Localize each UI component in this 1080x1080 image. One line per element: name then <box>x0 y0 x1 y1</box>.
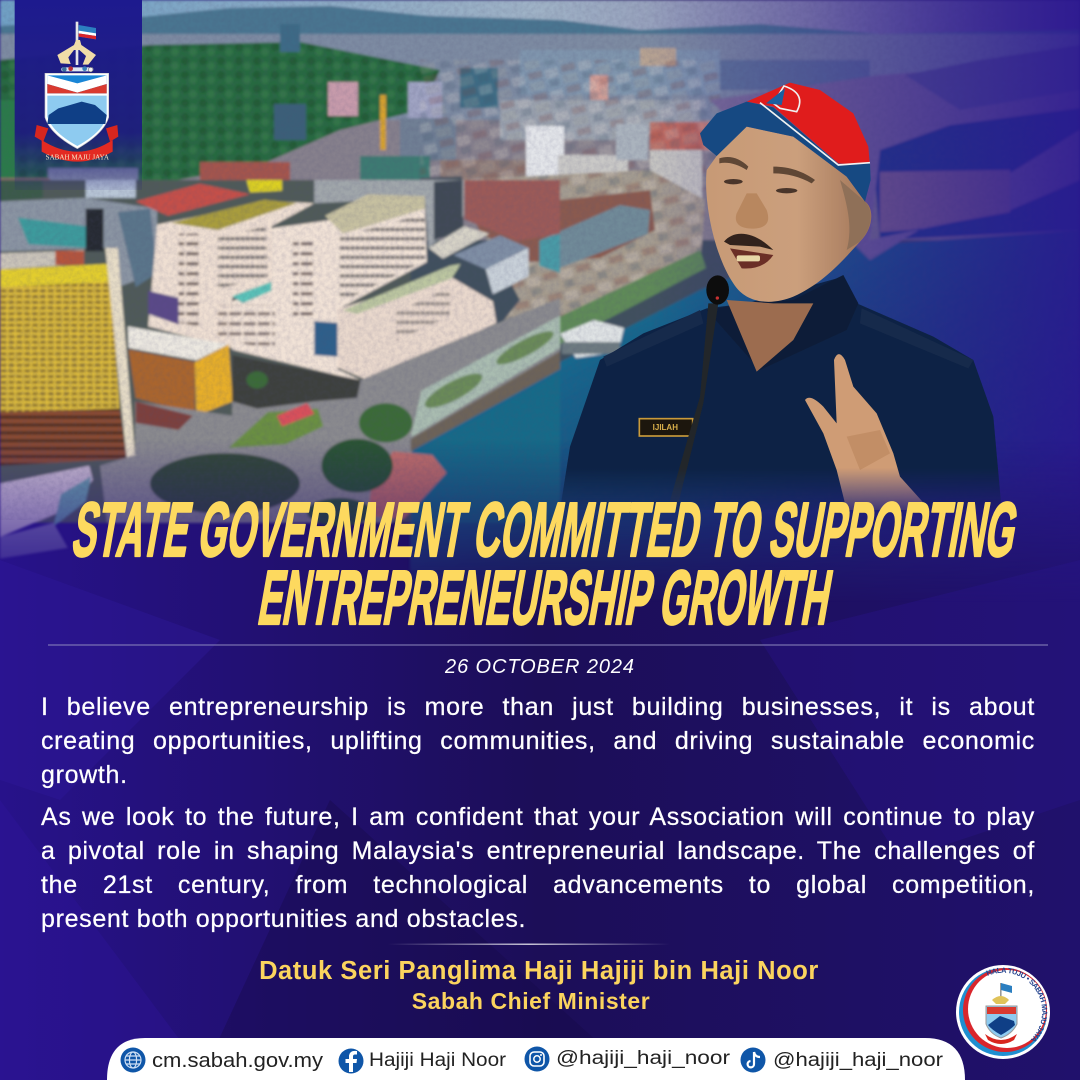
paragraph 1: growth. <box>41 761 128 789</box>
cap <box>700 83 871 202</box>
paragraph 1: creating opportunities, uplifting communities, and driving sustainable economic <box>41 727 1035 755</box>
portrait of the chief minister <box>560 83 1002 510</box>
paragraph 2: As we look to the future, I am confident that your Association will continue to play <box>41 803 1035 831</box>
paragraph 2: the 21st century, from technological advancements to global competition, <box>41 871 1035 899</box>
icon: instagram <box>524 1046 550 1072</box>
motto ribbon: SABAH MAJU JAYA <box>46 153 109 161</box>
social media bar: @hajiji_haji_noor <box>556 1048 731 1069</box>
paragraph 1: I believe entrepreneurship is more than just building businesses, it is about <box>41 693 1035 721</box>
right docks <box>710 60 1080 260</box>
social media bar <box>107 1038 965 1080</box>
social media bar: Hajiji Haji Noor <box>369 1050 507 1071</box>
face <box>706 127 871 302</box>
trees <box>359 403 412 442</box>
crest arms <box>57 40 96 65</box>
sea corner <box>413 402 560 523</box>
right far blocks <box>314 180 464 248</box>
date: 26 OCTOBER 2024 <box>445 656 635 678</box>
social media bar: cm.sabah.gov.my <box>152 1050 323 1072</box>
gold tower <box>0 280 120 412</box>
ferry terminal <box>560 320 624 358</box>
signatory title: Sabah Chief Minister <box>412 988 650 1014</box>
paragraph 2: present both opportunities and obstacles. <box>41 905 526 933</box>
shirt <box>560 277 1002 510</box>
distant blocks <box>280 24 300 52</box>
icon: facebook <box>338 1048 364 1074</box>
far left blocks <box>0 198 157 287</box>
ground <box>100 298 560 523</box>
lower left buildings detail <box>0 180 560 559</box>
circular badge: Hala Tuju Sabah Maju Jaya: HALA TUJU • SABAH MAJU JAYA <box>986 968 1048 1042</box>
circular badge: Hala Tuju Sabah Maju Jaya <box>956 965 1050 1059</box>
waterfront town <box>480 170 706 321</box>
white corner building <box>0 466 93 537</box>
wreath <box>61 66 93 72</box>
hand <box>805 354 930 510</box>
flag and pole <box>76 22 96 65</box>
orange building <box>128 326 229 360</box>
social media bar: @hajiji_haji_noor <box>773 1050 944 1071</box>
paragraph 2: a pivotal role in shaping Malaysia's entrepreneurial landscape. The challenges of <box>41 837 1035 865</box>
icon: website <box>120 1048 146 1072</box>
sea <box>410 230 1080 600</box>
paragraph 1 <box>41 693 1035 789</box>
shield <box>45 73 109 149</box>
name tag: IJILAH <box>653 423 678 432</box>
logo panel with state emblem <box>15 0 142 190</box>
pink walkway <box>368 451 446 519</box>
icon: tiktok <box>740 1048 766 1072</box>
headline <box>67 488 1024 641</box>
green hills <box>0 42 440 190</box>
signatory name: Datuk Seri Panglima Haji Hajiji bin Haji Noor <box>259 957 819 985</box>
complex wings <box>148 201 314 348</box>
paragraph 2 <box>40 803 1035 933</box>
city photo <box>0 0 1080 600</box>
microphone <box>667 275 729 510</box>
name tag <box>639 419 693 436</box>
motto ribbon <box>35 125 118 162</box>
